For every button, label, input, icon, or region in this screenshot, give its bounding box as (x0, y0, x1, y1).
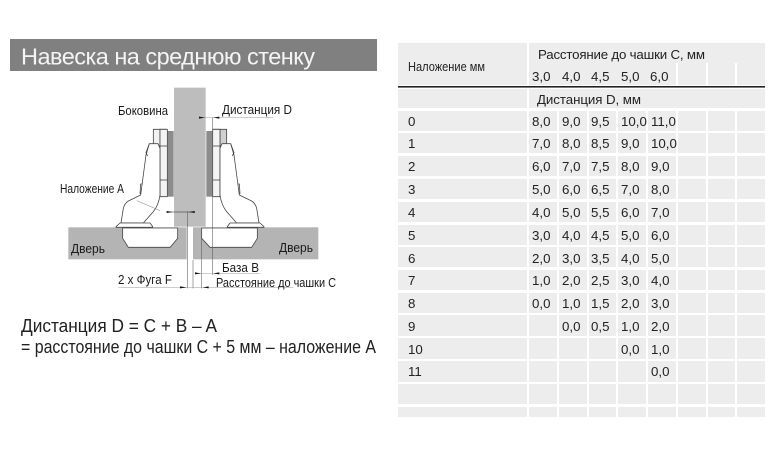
left door (68, 227, 187, 259)
table rows: 5 (408, 228, 415, 243)
table header: 6,0 (650, 69, 668, 84)
table rows: 5,0 (532, 182, 550, 197)
table header: Расстояние до чашки C, мм (538, 47, 705, 62)
table rows: 2,0 (532, 251, 550, 266)
table rows: 9,0 (621, 136, 640, 151)
table header (408, 47, 705, 107)
table header: 3,0 (532, 69, 550, 84)
table rows: 3,5 (591, 251, 610, 266)
table rows: 7,0 (651, 205, 670, 220)
table rows: 10 (408, 342, 423, 357)
table rows: 3,0 (532, 228, 550, 243)
table rows: 2,0 (621, 296, 640, 311)
table header: Дистанция D, мм (537, 92, 641, 107)
table rows: 4,0 (621, 251, 640, 266)
table rows: 8,0 (651, 182, 670, 197)
title banner (10, 39, 377, 71)
left hinge (116, 129, 178, 247)
table rows: 7 (408, 273, 415, 288)
table rows (408, 114, 677, 379)
table rows: 4 (408, 205, 415, 220)
formula text (21, 316, 376, 357)
cabinet side panel (174, 88, 206, 227)
table rows: 7,5 (591, 159, 610, 174)
table rows: 7,0 (532, 136, 550, 151)
dimension lines (118, 118, 293, 288)
table header: 4,0 (562, 69, 580, 84)
table rows: 9,0 (562, 114, 580, 129)
table rows: 4,0 (532, 205, 550, 220)
table rows: 0,0 (532, 296, 550, 311)
right door (193, 227, 318, 259)
table rows: 5,0 (621, 228, 640, 243)
table rows: 11,0 (651, 114, 676, 129)
table rows: 3,0 (562, 251, 580, 266)
title banner: Навеска на среднюю стенку (21, 44, 315, 70)
label: right door: Дверь (279, 240, 313, 255)
table rows: 6,0 (532, 159, 550, 174)
label: left door: Дверь (71, 241, 105, 256)
hinge diagram (60, 88, 336, 290)
table rows: 3,0 (651, 296, 670, 311)
data table (398, 43, 765, 417)
table rows: 1,0 (562, 296, 580, 311)
table rows: 5,0 (562, 205, 580, 220)
table grid (398, 43, 765, 417)
table rows: 8,0 (562, 136, 580, 151)
table rows: 0,0 (562, 319, 580, 334)
column separators (558, 63, 736, 417)
table rows: 1,0 (621, 319, 640, 334)
table rows: 8 (408, 296, 415, 311)
table rows: 3 (408, 182, 415, 197)
table rows: 5,0 (651, 251, 670, 266)
label: cup distance C: Расстояние до чашки C (216, 275, 336, 290)
table rows: 0 (408, 114, 415, 129)
table rows: 2,0 (651, 319, 670, 334)
table rows: 8,0 (621, 159, 640, 174)
label: base B: База B (222, 260, 259, 275)
table rows: 6,0 (651, 228, 670, 243)
table rows: 3,0 (621, 273, 640, 288)
table rows: 7,0 (621, 182, 640, 197)
table rows: 6,5 (591, 182, 610, 197)
table rows: 6 (408, 251, 415, 266)
formula text: Дистанция D = C + B – A (21, 316, 217, 336)
table header: 4,5 (591, 69, 610, 84)
header rule (398, 86, 765, 88)
table rows: 8,0 (532, 114, 550, 129)
table rows: 2,5 (591, 273, 610, 288)
table rows: 5,5 (591, 205, 610, 220)
label: joint F: 2 x Фуга F (118, 272, 172, 287)
table rows: 6,0 (621, 205, 640, 220)
table rows: 0,0 (651, 364, 670, 379)
table rows: 8,5 (591, 136, 610, 151)
label: side panel: Боковина (118, 103, 169, 118)
table rows: 1,0 (532, 273, 550, 288)
table rows: 10,0 (651, 136, 677, 151)
table rows: 1,0 (651, 342, 670, 357)
table rows: 0,5 (591, 319, 610, 334)
table rows: 1 (408, 136, 415, 151)
table rows: 10,0 (621, 114, 647, 129)
formula text: = расстояние до чашки C + 5 мм – наложение A (21, 337, 376, 357)
arrowheads (167, 117, 219, 288)
table rows: 4,5 (591, 228, 610, 243)
right hinge (202, 129, 264, 247)
table rows: 0,0 (621, 342, 640, 357)
table header: Наложение мм (408, 59, 485, 74)
table rows: 1,5 (591, 296, 610, 311)
table rows: 7,0 (562, 159, 580, 174)
label: overlay A: Наложение A (60, 181, 124, 196)
table rows: 2,0 (562, 273, 580, 288)
table rows: 11 (408, 364, 422, 379)
table rows: 9,0 (651, 159, 670, 174)
table rows: 4,0 (651, 273, 670, 288)
table rows: 9,5 (591, 114, 610, 129)
label: distance D: Дистанция D (222, 102, 292, 117)
table rows: 6,0 (562, 182, 580, 197)
table rows: 9 (408, 319, 415, 334)
table rows: 2 (408, 159, 415, 174)
table header: 5,0 (621, 69, 640, 84)
table rows: 4,0 (562, 228, 580, 243)
